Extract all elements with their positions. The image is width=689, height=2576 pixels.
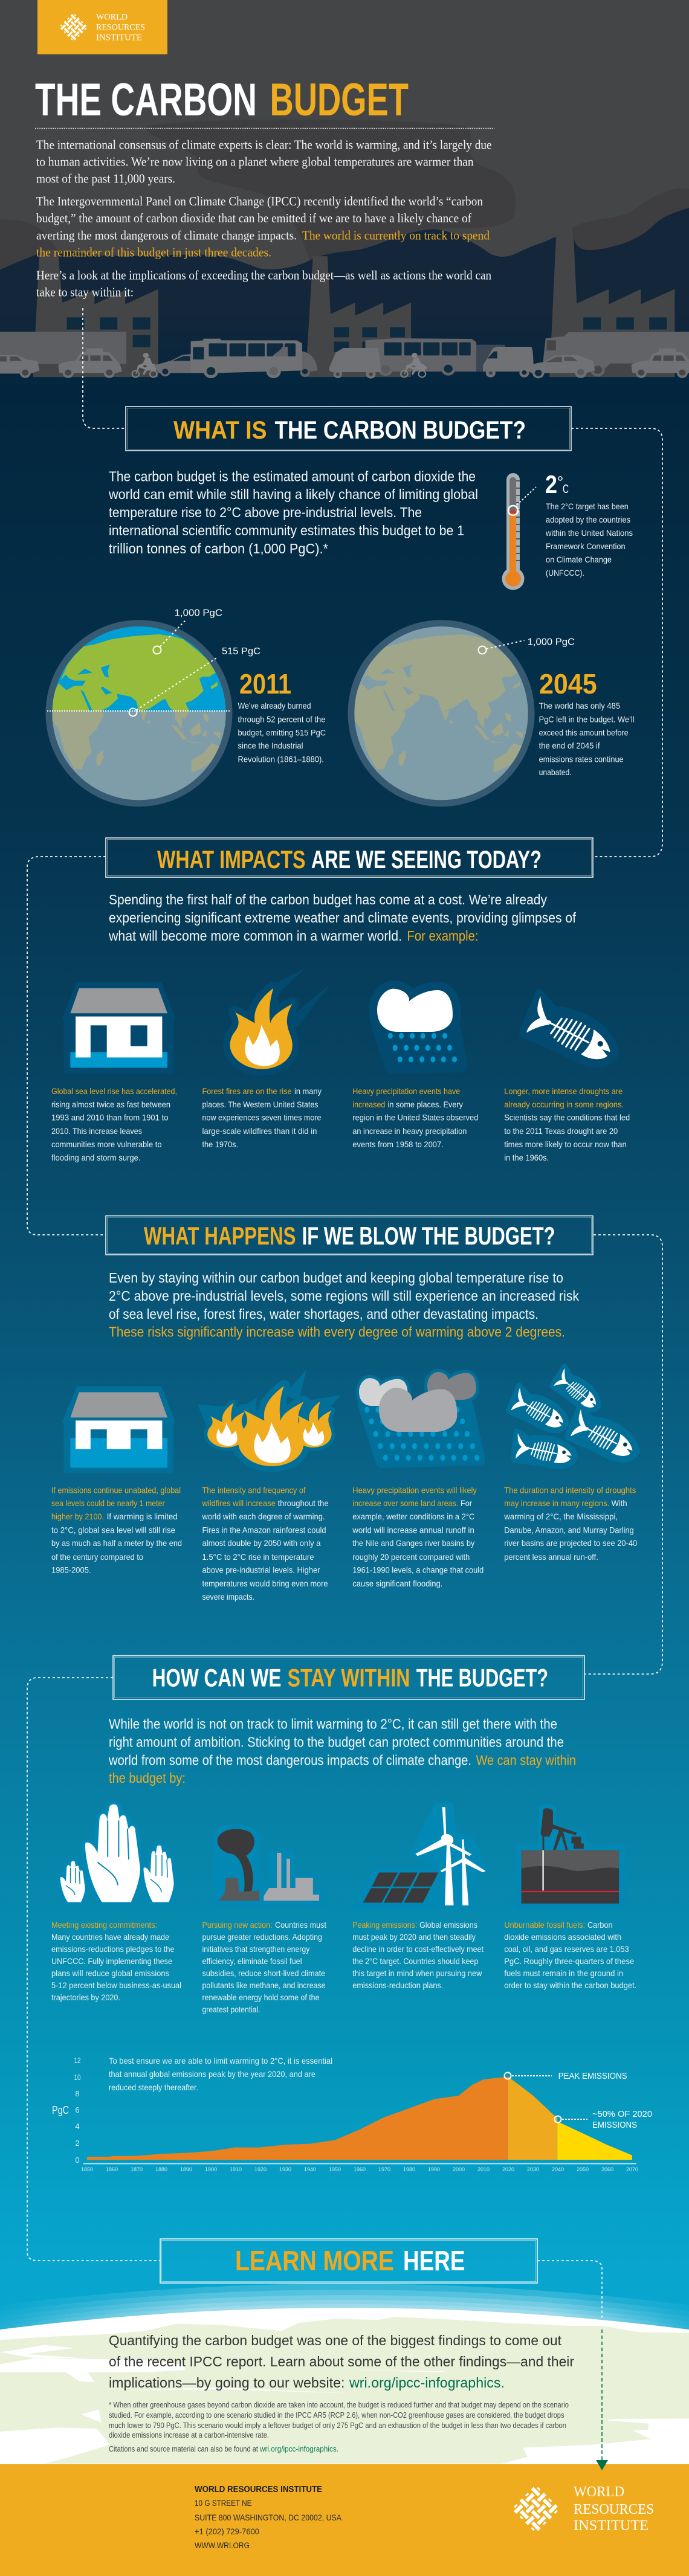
callout: 2 degrees: C: [563, 483, 569, 496]
intro text: take to stay within it:: [36, 285, 134, 300]
y axis: PgC: [52, 2104, 69, 2116]
text: consequence columns: increase over some land areas.: [352, 1498, 458, 1508]
chart text: that annual global emissions peak by the year 2020, and are: [109, 2069, 315, 2079]
text: consequence columns: by as much as half a meter by the end: [51, 1538, 182, 1548]
text: solution columns: trajectories by 2020.: [51, 1992, 120, 2002]
text: impact columns: Scientists say the conditions that led: [504, 1113, 630, 1122]
text: consequence columns: river basins are projected to see 20-40: [504, 1538, 637, 1548]
callout: 2 degrees: adopted by the countries: [546, 515, 630, 524]
text: consequence columns: If warming is limited: [107, 1512, 178, 1521]
text: consequence columns: temperatures would bring even more: [202, 1579, 328, 1588]
x axis: 1920: [254, 2166, 267, 2172]
text: impact columns: Longer, more intense droughts are: [504, 1086, 623, 1096]
y axis: 12: [74, 2056, 81, 2065]
footer contact details: SUITE 800 WASHINGTON, DC 20002, USA: [195, 2513, 342, 2522]
text: solution columns: emissions-reduction plans.: [352, 1980, 443, 1990]
text: consequence columns: wildfires will increase: [202, 1498, 276, 1508]
text: consequence columns: Heavy precipitation events will likely: [352, 1485, 477, 1495]
text: solution columns: PgC. Roughly three-quarters of these: [504, 1956, 634, 1966]
text: solution columns: dioxide emissions associated with: [504, 1932, 621, 1942]
icon: oil pump and fossil fuel reserves: [515, 1804, 625, 1910]
text: impact columns: 2010. This increase leaves: [51, 1126, 142, 1136]
text: consequence columns: may increase in many regions.: [504, 1498, 609, 1508]
text: impact columns: Heavy precipitation events have: [352, 1086, 460, 1096]
x axis: 1880: [155, 2166, 167, 2172]
icon: forest fire: [230, 968, 330, 1069]
heading: how can we stay within: STAY WITHIN: [288, 1664, 410, 1692]
text: consequence columns: Danube, Amazon, and Murray Darling: [504, 1525, 634, 1534]
text: solution columns: emissions-reductions pledges to the: [51, 1944, 175, 1954]
text: learn more paragraph: Quantifying the carbon budget was one of the biggest findings to come out: [109, 2333, 562, 2348]
text: impact columns: large-scale wildfires than it did in: [202, 1126, 317, 1136]
text: consequence columns: to 2°C, global sea level will still rise: [51, 1525, 175, 1534]
footer logo: RESOURCES: [574, 2502, 654, 2517]
intro text: The international consensus of climate experts is clear: The world is warming, and it’s largely due: [36, 137, 492, 152]
text: 2011: Revolution (1861–1880).: [238, 755, 324, 764]
footer contact details: 10 G STREET NE: [195, 2498, 251, 2508]
heading: what happens: WHAT HAPPENS: [144, 1222, 296, 1250]
text: learn more paragraph: implications—by going to our website:: [109, 2375, 344, 2391]
x axis: 1850: [81, 2166, 93, 2172]
text: impact columns: in some places. Every: [388, 1100, 463, 1109]
text: consequence columns: severe impacts.: [202, 1592, 254, 1602]
x axis: 2040: [552, 2166, 564, 2172]
text: solution columns: pollutants like methane, and increase: [202, 1980, 326, 1990]
text: 2011: budget, emitting 515 PgC: [238, 727, 326, 737]
text: impact columns: the 1970s.: [202, 1139, 238, 1149]
text: consequence columns: warming of 2°C, the Mississippi,: [503, 1512, 618, 1521]
icon: thermometer: [502, 473, 536, 590]
text: solution columns: greatest potential.: [202, 2004, 260, 2014]
text: consequence columns: With: [612, 1498, 627, 1508]
text: 2011: 2011: [239, 668, 291, 700]
text: what happens intro: Even by staying within our carbon budget and keeping global temperature rise to: [109, 1270, 563, 1286]
x axis: 1870: [131, 2166, 143, 2172]
text: carbon budget definition: The carbon budget is the estimated amount of carbon dioxide the: [109, 468, 476, 484]
icon: house with sea level rise: [62, 982, 176, 1074]
x axis: 1970: [378, 2166, 390, 2172]
text: consequence columns: The duration and intensity of droughts: [504, 1485, 636, 1495]
intro text: [36, 137, 492, 300]
text: footnote: much lower to 790 PgC. This scenario would imply a leftover budget of only 275 PgC and an exhaustion of the budget in less than two decades if carbon: [109, 2421, 566, 2430]
text: impact columns: Global sea level rise has accelerated,: [51, 1086, 177, 1096]
text: impact columns: in the 1960s.: [504, 1153, 549, 1162]
text: impact columns: already occurring in some regions.: [504, 1100, 624, 1109]
text: 2045: emissions rates continue: [539, 755, 624, 764]
intro text: budget,” the amount of carbon dioxide that can be emitted if we are to have a likely chance of: [36, 211, 471, 225]
text: solution columns: Global emissions: [419, 1920, 477, 1930]
globe: 2045: 1,000 PgC: [528, 637, 575, 647]
footer logo: INSTITUTE: [574, 2518, 649, 2534]
heading: what is the carbon budget: [126, 407, 571, 451]
y axis: 4: [75, 2122, 80, 2131]
footer band: [0, 2464, 689, 2576]
footer contact details: +1 (202) 729-7600: [195, 2526, 259, 2536]
vehicles right: [329, 332, 689, 379]
text: 2045: PgC left in the budget. We’ll: [539, 714, 635, 724]
text: footnote: wri.org/ipcc-infographics.: [259, 2444, 338, 2453]
icon: wind turbines and solar panel: [352, 1803, 488, 1910]
text: solution columns: plans will reduce global emissions: [51, 1968, 169, 1978]
text: consequence columns: For: [461, 1498, 472, 1508]
callout: 2 degrees: Framework Convention: [546, 541, 626, 551]
callout: 2 degrees: [545, 470, 633, 578]
text: 2045: 2045: [539, 668, 597, 700]
x axis: 2070: [626, 2166, 638, 2172]
text: solution columns: Meeting existing commitments:: [51, 1920, 157, 1930]
text: consequence columns: above pre-industrial levels. Higher: [202, 1565, 320, 1574]
x axis: 1930: [279, 2166, 291, 2172]
text: impact columns: increased: [352, 1100, 385, 1109]
text: impact columns: flooding and storm surge.: [51, 1153, 141, 1162]
heading: what impacts: [106, 838, 593, 877]
text: impact columns: times more likely to occur now than: [504, 1139, 627, 1149]
heading: what is the carbon budget: WHAT IS: [173, 416, 267, 444]
text: solution columns: Unburnable fossil fuels:: [504, 1920, 585, 1930]
icon: fish skeleton: [519, 993, 624, 1075]
x axis: 2000: [453, 2166, 465, 2172]
text: footnote: * When other greenhouse gases beyond carbon dioxide are taken into account, the budget is reduced further and that budget may depend on the scenario: [109, 2400, 569, 2409]
text: solution columns: renewable energy hold some of the: [202, 1992, 320, 2002]
smoke cloud: [0, 0, 689, 269]
callout: 2 degrees: 2: [545, 470, 557, 498]
y axis: [52, 2056, 81, 2165]
text: solution columns: initiatives that strengthen energy: [202, 1944, 309, 1954]
footer contact details: WORLD RESOURCES INSTITUTE: [195, 2484, 322, 2494]
text: impacts intro: [108, 892, 577, 944]
heading: how can we stay within: HOW CAN WE: [152, 1664, 282, 1692]
logo: World Resources Institute: WORLD: [96, 13, 128, 22]
intro text: averting the most dangerous of climate change impacts.: [36, 228, 297, 242]
text: stay within intro: right amount of ambition. Sticking to the budget can protect communities around the: [109, 1734, 564, 1750]
text: impact columns: to the 2011 Texas drought are 20: [504, 1126, 618, 1136]
intro text: most of the past 11,000 years.: [36, 172, 175, 186]
x axis: 2010: [477, 2166, 490, 2172]
chart text: [109, 2056, 332, 2092]
heading: learn more here: [160, 2239, 537, 2283]
y axis: 8: [75, 2089, 80, 2098]
text: solution columns: fuels must remain in the ground in: [504, 1968, 623, 1978]
x axis: 1980: [403, 2166, 415, 2172]
text: impact columns: an increase in heavy precipitation: [352, 1126, 467, 1136]
heading: how can we stay within: THE BUDGET?: [416, 1664, 548, 1692]
text: consequence columns: If emissions continue unabated, global: [51, 1485, 181, 1495]
heading: how can we stay within: [113, 1656, 584, 1699]
text: consequence columns: higher by 2100.: [51, 1512, 104, 1521]
x axis: 2060: [601, 2166, 613, 2172]
text: 2045: The world has only 485: [539, 701, 620, 710]
callout: 50 percent of 2020 emissions: [555, 2109, 652, 2130]
text: footnote: [109, 2400, 569, 2453]
text: impacts intro: experiencing significant extreme weather and climate events, providing glimpses of: [109, 910, 577, 926]
text: consequence columns: roughly 20 percent compared with: [352, 1552, 470, 1562]
text: solution columns: Peaking emissions:: [352, 1920, 417, 1930]
text: consequence columns: almost double by 2050 with only a: [202, 1538, 321, 1548]
text: impact columns: Forest fires are on the rise: [202, 1086, 292, 1096]
callout: peak emissions: PEAK EMISSIONS: [558, 2071, 627, 2081]
text: solution columns: coal, oil, and gas reserves are 1,053: [504, 1944, 629, 1954]
intro text: Here’s a look at the implications of exceeding the carbon budget—as well as actions the world can: [36, 268, 491, 283]
icon: flooded house: [62, 1386, 176, 1473]
icon: power plant emitting smoke: [213, 1824, 325, 1907]
text: solution columns: Countries must: [275, 1920, 326, 1930]
text: consequence columns: 1.5°C to 2°C rise in temperature: [202, 1552, 314, 1562]
callout: 50 percent of 2020 emissions: EMISSIONS: [592, 2120, 637, 2130]
dashed connector path: [27, 308, 662, 2326]
text: consequence columns: world with each degree of warming.: [202, 1512, 325, 1521]
text: consequence columns: world will increase annual runoff in: [352, 1525, 474, 1534]
text: what happens intro: 2°C above pre-industrial levels, some regions will still experience an increased risk: [109, 1288, 579, 1304]
text: footnote: dioxide emissions increase at a carbon-intensive rate.: [109, 2430, 269, 2439]
text: solution columns: must peak by 2020 and then steadily: [352, 1932, 476, 1942]
callout: 2 degrees: on Climate Change: [546, 555, 612, 564]
text: impacts intro: For example:: [407, 928, 479, 944]
x axis: 1890: [180, 2166, 192, 2172]
logo: World Resources Institute: INSTITUTE: [96, 33, 142, 42]
intro text: The world is currently on track to spend: [302, 228, 490, 242]
text: learn more paragraph: wri.org/ipcc-infographics.: [349, 2375, 505, 2391]
text: solution columns: pursue greater reductions. Adopting: [202, 1932, 322, 1942]
footer logo: WORLD: [574, 2484, 624, 2500]
text: learn more paragraph: [109, 2333, 574, 2391]
text: solution columns: Many countries have already made: [51, 1932, 169, 1942]
text: consequence columns: sea levels could be nearly 1 meter: [51, 1498, 165, 1508]
text: 2045: unabated.: [539, 767, 572, 777]
y axis: 2: [75, 2139, 80, 2148]
text: consequence columns: 1985-2005.: [51, 1565, 91, 1574]
text: footnote: Citations and source material can also be found at: [109, 2444, 258, 2453]
text: stay within intro: the budget by:: [109, 1770, 186, 1786]
text: carbon budget definition: international scientific community estimates this budget to be 1: [109, 523, 464, 538]
text: solution columns: Pursuing new action:: [202, 1920, 272, 1930]
text: consequence columns: The intensity and frequency of: [202, 1485, 306, 1495]
text: consequence columns: Fires in the Amazon rainforest could: [202, 1525, 326, 1534]
text: solution columns: efficiency, eliminate fossil fuel: [202, 1956, 302, 1966]
text: stay within intro: world from some of the most dangerous impacts of climate change.: [108, 1752, 471, 1768]
text: impact columns: now experiences seven times more: [202, 1113, 322, 1122]
heading: what impacts: ARE WE SEEING TODAY?: [311, 845, 542, 874]
text: 2011: [238, 668, 326, 764]
heading: what happens: [106, 1216, 593, 1255]
text: 2045: the end of 2045 if: [539, 741, 600, 750]
chart areas: [87, 2076, 632, 2160]
text: solution columns: the 2°C target. Countries should keep: [352, 1956, 478, 1966]
callout: 2 degrees: within the United Nations: [545, 528, 633, 538]
callout: peak emissions: [504, 2071, 627, 2081]
text: footnote: studied. For example, according to one scenario studied in the IPCC AR5 (RCP 2.6), when non-CO2 greenhouse gases are considered, the budget drops: [109, 2410, 564, 2420]
globe: 2011: 515 PgC: [222, 646, 260, 657]
icon: storm clouds with heavy rain: [359, 1372, 480, 1463]
icon: four fish skeletons: [506, 1366, 643, 1472]
x axis: [81, 2166, 638, 2172]
text: 2011: We’ve already burned: [238, 701, 311, 710]
intro text: to human activities. We’re now living on a planet where global temperatures are warmer than: [36, 155, 474, 169]
text: impact columns: events from 1958 to 2007.: [352, 1139, 444, 1149]
icon: rain cloud: [377, 989, 462, 1067]
text: consequence columns: cause significant flooding.: [352, 1579, 442, 1588]
text: consequence columns: 1961-1990 levels, a change that could: [352, 1565, 484, 1574]
logo: World Resources Institute: [37, 0, 167, 54]
text: consequence columns: percent less annual run-off.: [504, 1552, 598, 1562]
text: consequence columns: example, wetter conditions in a 2°C: [352, 1512, 474, 1521]
text: solution columns: Carbon: [587, 1920, 613, 1930]
text: consequence columns: [51, 1485, 637, 1602]
heading: learn more here: HERE: [403, 2245, 465, 2276]
text: impact columns: [51, 1086, 630, 1162]
text: consequence columns: the Nile and Ganges river basins by: [352, 1538, 474, 1548]
text: carbon budget definition: [108, 468, 478, 556]
text: impacts intro: what will become more common in a warmer world.: [108, 928, 402, 944]
text: impact columns: rising almost twice as fast between: [51, 1100, 170, 1109]
title: BUDGET: [270, 74, 409, 126]
heading: what is the carbon budget: THE CARBON BUDGET?: [274, 416, 526, 444]
text: impact columns: places. The Western United States: [202, 1100, 318, 1109]
intro text: The Intergovernmental Panel on Climate Change (IPCC) recently identified the world’s “carbon: [36, 194, 483, 208]
x axis: 1990: [428, 2166, 440, 2172]
vehicles left: [0, 332, 344, 378]
text: solution columns: [51, 1920, 636, 2014]
globe: 2011: [46, 608, 260, 807]
y axis: 6: [75, 2105, 80, 2114]
planet horizon with glow: [0, 2308, 689, 2464]
text: solution columns: decline in order to cost-effectively meet: [352, 1944, 484, 1954]
text: stay within intro: While the world is not on track to limit warming to 2°C, it can still get there with the: [109, 1716, 557, 1732]
text: solution columns: this target in mind when pursuing new: [352, 1968, 482, 1978]
text: what happens intro: These risks significantly increase with every degree of warming above 2 degrees.: [109, 1324, 565, 1340]
text: 2045: [539, 668, 635, 777]
footer logo: [511, 2484, 654, 2534]
logo: World Resources Institute: RESOURCES: [96, 23, 145, 33]
text: solution columns: subsidies, reduce short-lived climate: [202, 1968, 325, 1978]
factories: [33, 237, 674, 377]
text: impacts intro: Spending the first half of the carbon budget has come at a cost. We’re already: [109, 892, 547, 907]
heading: learn more here: LEARN MORE: [235, 2245, 394, 2276]
x axis: 1940: [304, 2166, 316, 2172]
x axis: 1950: [329, 2166, 341, 2172]
text: solution columns: UNFCCC. Fully implementing these: [51, 1956, 172, 1966]
intro text: the remainder of this budget in just three decades.: [36, 245, 271, 260]
chart text: reduced steeply thereafter.: [109, 2082, 198, 2092]
text: what happens intro: [109, 1270, 579, 1340]
callout: 2 degrees: (UNFCCC).: [546, 568, 584, 578]
x axis: 2050: [577, 2166, 589, 2172]
text: 2011: since the Industrial: [238, 741, 303, 750]
footer contact details: WWW.WRI.ORG: [195, 2540, 250, 2550]
x axis: 1910: [230, 2166, 242, 2172]
text: stay within intro: We can stay within: [476, 1752, 576, 1768]
x axis: 1860: [106, 2166, 118, 2172]
y axis: 10: [74, 2073, 81, 2082]
x axis: 1960: [354, 2166, 366, 2172]
arrow: dashed line to footer: [596, 2330, 608, 2470]
text: consequence columns: throughout the: [278, 1498, 329, 1508]
icon: wildfires: [198, 1370, 341, 1466]
x axis: 2030: [527, 2166, 539, 2172]
text: impact columns: in many: [294, 1086, 322, 1096]
text: carbon budget definition: world can emit while still having a likely chance of limiting global: [108, 486, 478, 502]
callout: 2 degrees: The 2°C target has been: [546, 501, 629, 511]
text: carbon budget definition: temperature rise to 2°C above pre-industrial levels. The: [109, 504, 422, 520]
globe: 2011: 1,000 PgC: [175, 608, 222, 619]
text: what happens intro: of sea level rise, forest fires, water shortages, and other devastating impacts.: [109, 1306, 539, 1322]
heading: what impacts: WHAT IMPACTS: [157, 845, 306, 874]
text: solution columns: 5-12 percent below business-as-usual: [51, 1980, 181, 1990]
heading: what happens: IF WE BLOW THE BUDGET?: [302, 1222, 555, 1250]
x axis: 2020: [502, 2166, 514, 2172]
icon: raised hands: [60, 1805, 174, 1902]
header scene: smoke, factories and traffic: [0, 0, 689, 379]
footer contact details: [195, 2484, 342, 2550]
text: 2045: exceed this amount before: [539, 727, 629, 737]
x axis: 1900: [205, 2166, 217, 2172]
callout: 50 percent of 2020 emissions: ~50% OF 2020: [592, 2109, 652, 2119]
text: 2011: through 52 percent of the: [238, 714, 326, 724]
chart: emissions pathway area chart: [52, 2056, 652, 2172]
text: impact columns: communities more vulnerable to: [51, 1139, 162, 1149]
chart text: To best ensure we are able to limit warming to 2°C, it is essential: [109, 2056, 332, 2066]
title: THE CARBON: [35, 74, 257, 126]
text: impact columns: region in the United States observed: [352, 1113, 478, 1122]
continents on the horizon: [0, 2317, 689, 2464]
y axis: 0: [75, 2156, 80, 2165]
text: consequence columns: of the century compared to: [51, 1552, 143, 1562]
text: impact columns: 1993 and 2010 than from 1901 to: [51, 1113, 169, 1122]
text: carbon budget definition: trillion tonnes of carbon (1,000 PgC).*: [109, 541, 328, 556]
globe: 2045: [348, 620, 575, 807]
text: solution columns: order to stay within the carbon budget.: [504, 1980, 636, 1990]
text: stay within intro: [108, 1716, 576, 1786]
text: learn more paragraph: of the recent IPCC report. Learn about some of the other findings—and their: [109, 2354, 574, 2369]
